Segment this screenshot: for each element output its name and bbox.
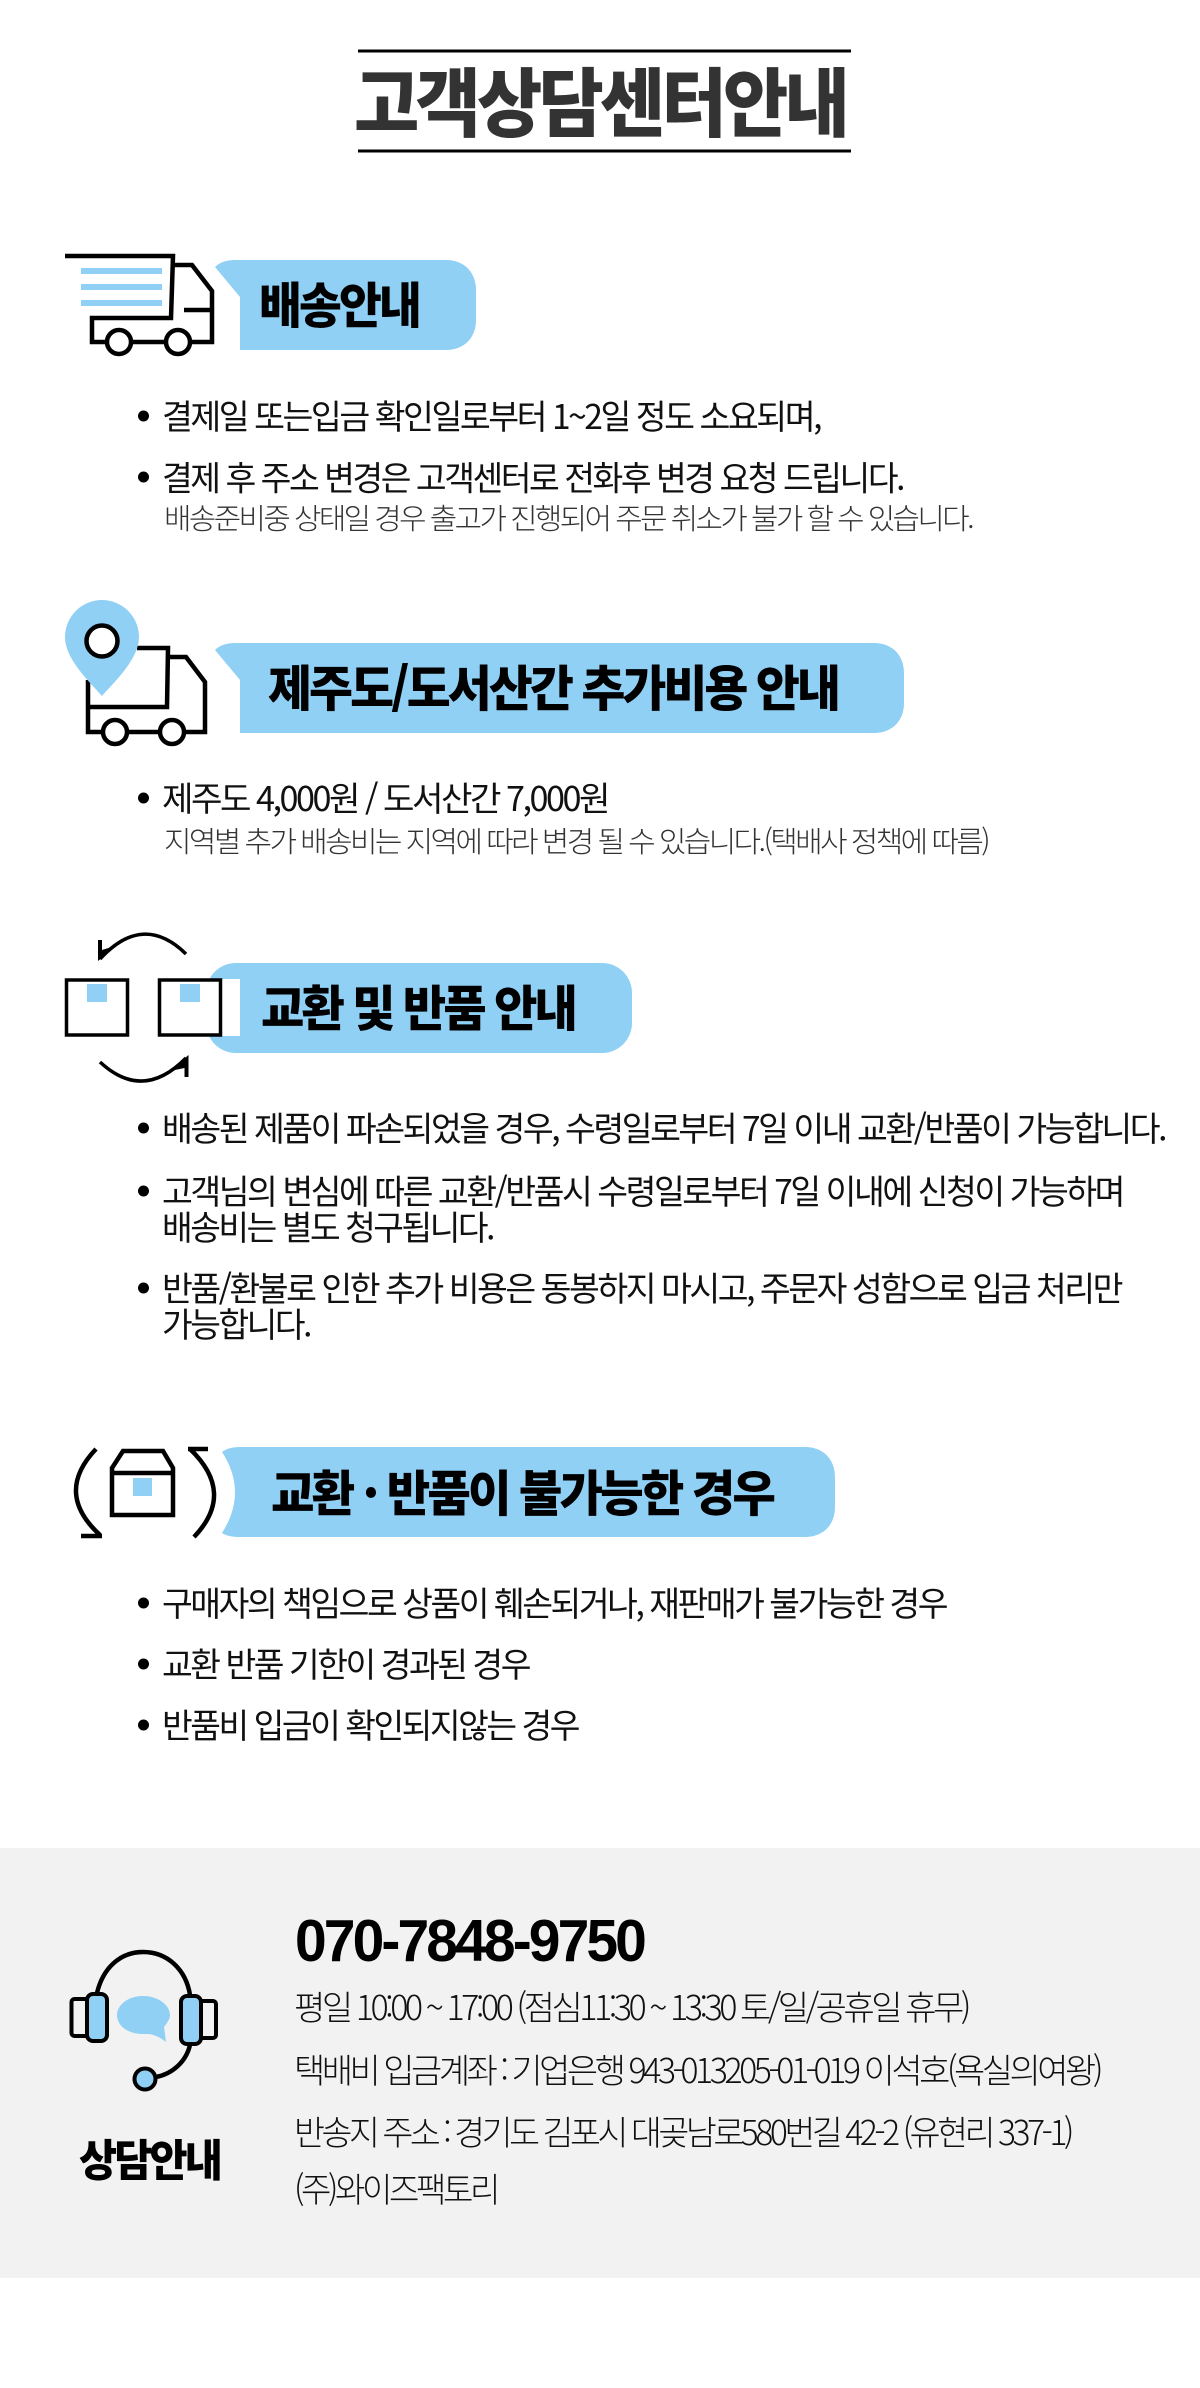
- title: 고객상담센터안내: [354, 44, 846, 152]
- text block: exchange conditions: 배송된 제품이 파손되었을 경우, 수령일로부터 7일 이내 교환/반품이 가능합니다.: [162, 1102, 1165, 1151]
- text block: non-returnable conditions: 교환 반품 기한이 경과된 경우: [162, 1638, 530, 1687]
- text block: non-returnable conditions: 반품비 입금이 확인되지않는 경우: [162, 1699, 579, 1748]
- phone number: 070-7848-9750: [295, 1908, 645, 1974]
- icon: box in brackets: [76, 1449, 214, 1537]
- icon: headset with speech bubble: [72, 1952, 216, 2090]
- contact details: (주)와이즈팩토리: [294, 2163, 497, 2212]
- heading pill: exchange and returns: 교환 및 반품 안내: [261, 970, 575, 1041]
- text block: non-returnable conditions: [138, 1577, 947, 1748]
- text block: exchange conditions: [138, 1102, 1165, 1347]
- text block: delivery notes: 배송준비중 상태일 경우 출고가 진행되어 주문 취소가 불가 할 수 있습니다.: [164, 496, 973, 538]
- panel: contact footer: [0, 1848, 1200, 2278]
- text block: non-returnable conditions: 구매자의 책임으로 상품이 훼손되거나, 재판매가 불가능한 경우: [162, 1577, 947, 1626]
- text block: Jeju fees: 지역별 추가 배송비는 지역에 따라 변경 될 수 있습니다.(택배사 정책에 따름): [164, 819, 988, 861]
- text block: exchange conditions: 가능합니다.: [162, 1298, 310, 1347]
- text block: Jeju fees: 제주도 4,000원 / 도서산간 7,000원: [162, 772, 608, 821]
- text block: exchange conditions: 반품/환불로 인한 추가 비용은 동봉하지 마시고, 주문자 성함으로 입금 처리만: [162, 1262, 1123, 1311]
- panel: delivery: [65, 256, 973, 538]
- contact details: 평일 10:00 ~ 17:00 (점심11:30 ~ 13:30 토/일/공휴일 휴무): [294, 1981, 969, 2030]
- heading pill: non-returnable cases: [222, 1447, 835, 1537]
- panel: Jeju and islands: [65, 600, 988, 861]
- panel: exchange and returns: [66, 934, 1165, 1347]
- contact details: 택배비 입금계좌 : 기업은행 943-013205-01-019 이석호(욕실의여왕): [294, 2044, 1101, 2093]
- icon: delivery truck: [65, 256, 212, 354]
- text block: Jeju fees: [138, 772, 988, 861]
- heading pill: delivery: [215, 260, 476, 350]
- text block: delivery notes: 결제일 또는입금 확인일로부터 1~2일 정도 소요되며,: [162, 390, 821, 439]
- contact details: [294, 1981, 1101, 2212]
- text block: exchange conditions: 고객님의 변심에 따른 교환/반품시 수령일로부터 7일 이내에 신청이 가능하며: [162, 1165, 1123, 1214]
- heading pill: Jeju and islands: 제주도/도서산간 추가비용 안내: [268, 650, 838, 721]
- heading pill: delivery: 배송안내: [259, 267, 419, 338]
- heading pill: exchange and returns: [206, 963, 632, 1053]
- contact label: 상담안내: [79, 2125, 220, 2189]
- panel: non-returnable cases: [76, 1447, 947, 1748]
- icon: boxes with exchange arrows: [66, 934, 220, 1081]
- heading pill: Jeju and islands: [215, 643, 904, 733]
- contact details: 반송지 주소 : 경기도 김포시 대곶남로580번길 42-2 (유현리 337-1): [294, 2106, 1072, 2155]
- text block: delivery notes: [138, 390, 973, 538]
- icon: truck with location pin: [65, 600, 205, 744]
- text block: delivery notes: 결제 후 주소 변경은 고객센터로 전화후 변경 요청 드립니다.: [162, 452, 903, 500]
- text block: exchange conditions: 배송비는 별도 청구됩니다.: [162, 1201, 493, 1250]
- heading pill: non-returnable cases: 교환 · 반품이 불가능한 경우: [271, 1455, 775, 1526]
